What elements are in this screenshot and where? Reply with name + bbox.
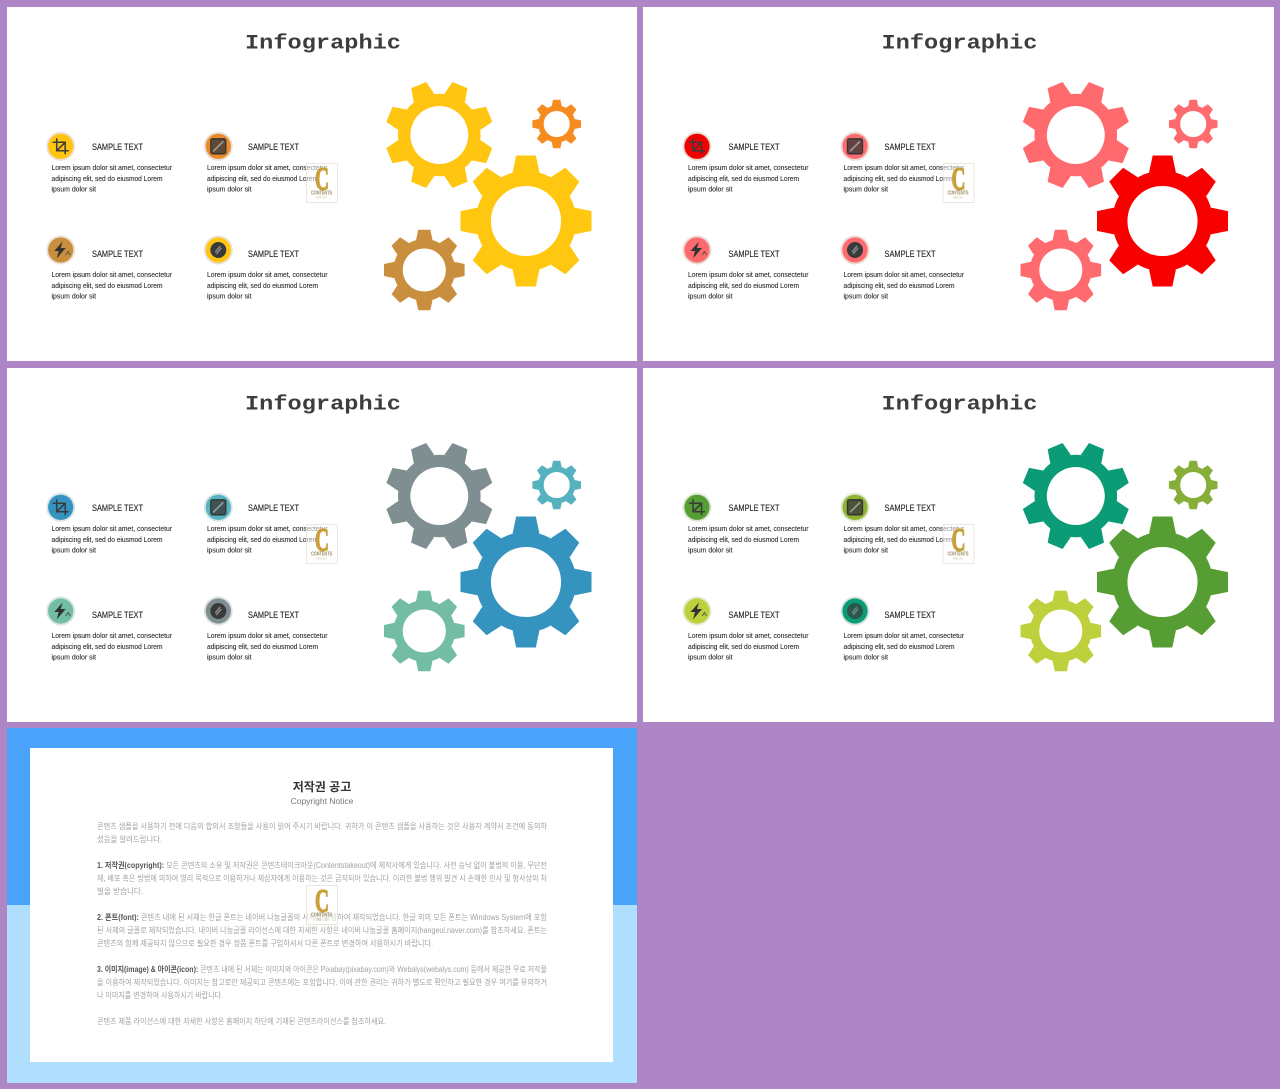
item: circle <box>840 236 964 300</box>
item: bolt: SAMPLE TEXT <box>728 610 780 620</box>
watermark: TAKE OUT <box>316 556 327 560</box>
panel: copyright notice <box>7 728 637 1083</box>
item: bolt: Lorem ipsum dolor sit amet, consectetur <box>688 631 809 640</box>
item: square: Lorem ipsum dolor sit amet, consectetur <box>844 524 964 533</box>
notice section 2: 된 서체의 글꼴로 제작되었습니다. 네이버 나눔글꼴 라이선스에 대한 자세한 사항은 네이버 나눔글꼴 홈페이지(hangeul.naver.com)를 참조하세요. 폰트는 <box>97 925 547 935</box>
notice section 1: 1. 저작권(copyright): 모든 콘텐츠의 소유 및 저작권은 콘텐츠테이크아웃(Contentstakeout)에 제작사에게 있습니다. 사전 승낙 없이 불법적 이용, 무단전 <box>97 860 547 870</box>
item: crop: ipsum dolor sit <box>52 546 97 554</box>
item: bolt: adipiscing elit, sed do eiusmod Lorem <box>688 281 799 290</box>
notice section 2: 2. 폰트(font): 콘텐츠 내에 된 서체는 한글 폰트는 네이버 나눔글꼴의 서체를 활용하여 제작되었습니다. 한글 외의 모든 폰트는 Windows System에 포함 <box>97 912 548 922</box>
item: crop: Lorem ipsum dolor sit amet, consectetur <box>52 163 172 172</box>
item: bolt: Lorem ipsum dolor sit amet, consectetur <box>688 270 809 279</box>
item: circle: Lorem ipsum dolor sit amet, consectetur <box>207 270 328 279</box>
item: crop: SAMPLE TEXT <box>728 503 780 513</box>
watermark: C <box>315 884 329 920</box>
item: square <box>204 493 328 554</box>
item: circle: SAMPLE TEXT <box>884 249 936 259</box>
notice section 2 <box>97 912 548 948</box>
item: square: Lorem ipsum dolor sit amet, consectetur <box>207 163 328 172</box>
item: circle <box>204 596 328 662</box>
notice section 3: 을 이용하여 제작되었습니다. 이미지는 참고로만 제공되고 콘텐츠에는 포함합니다. 이에 관한 권리는 귀하가 별도로 확인하고 필요한 경우 여기를 유의하거 <box>97 977 547 987</box>
item: bolt: SAMPLE TEXT <box>92 610 143 620</box>
item: circle: adipiscing elit, sed do eiusmod Lorem <box>844 642 954 651</box>
item: circle: adipiscing elit, sed do eiusmod Lorem <box>207 642 318 651</box>
watermark: TAKE OUT <box>952 196 964 200</box>
item: circle: ipsum dolor sit <box>844 292 889 300</box>
panel: red gears <box>643 7 1274 361</box>
item: square: adipiscing elit, sed do eiusmod Lorem <box>844 535 954 544</box>
watermark: CONTENTS <box>948 190 969 196</box>
item: bolt: SAMPLE TEXT <box>92 249 143 259</box>
item: bolt: Lorem ipsum dolor sit amet, consectetur <box>52 631 172 640</box>
item: circle: adipiscing elit, sed do eiusmod Lorem <box>844 281 954 290</box>
item: bolt <box>682 236 809 300</box>
panel: blue gears <box>7 368 637 722</box>
watermark <box>306 884 338 924</box>
item: bolt: ipsum dolor sit <box>52 292 97 300</box>
item: crop: SAMPLE TEXT <box>728 142 780 152</box>
notice subheading: Copyright Notice <box>291 796 354 806</box>
item: square: adipiscing elit, sed do eiusmod Lorem <box>207 174 318 183</box>
notice section 3: 나 이미지를 변경하여 사용하시기 바랍니다. <box>97 990 223 1000</box>
notice section 3: 3. 이미지(image) & 아이콘(icon): 콘텐츠 내에 된 서체는 이미지와 아이콘은 Pixabay(pixabay.com)와 Webalys(webalys.com) 등에서 제공한 무료 저작물 <box>97 964 547 974</box>
item: crop: Lorem ipsum dolor sit amet, consectetur <box>688 163 809 172</box>
watermark: CONTENTS <box>311 912 333 918</box>
item: crop: adipiscing elit, sed do eiusmod Lorem <box>688 535 799 544</box>
notice section 1: 벌을 받습니다. <box>97 886 143 896</box>
title: Infographic <box>245 394 401 416</box>
notice section 1 <box>97 860 547 896</box>
item: circle: ipsum dolor sit <box>207 652 252 662</box>
notice heading: 저작권 공고 <box>293 779 351 794</box>
item: bolt: adipiscing elit, sed do eiusmod Lorem <box>52 642 162 651</box>
item: crop: SAMPLE TEXT <box>92 142 143 152</box>
item: square: Lorem ipsum dolor sit amet, consectetur <box>207 524 328 533</box>
item: bolt <box>682 596 809 662</box>
item: crop <box>46 493 172 554</box>
gears <box>1005 425 1228 671</box>
notice intro: 셨음을 알려드립니다. <box>97 834 162 844</box>
notice closing line: 콘텐츠 제품 라이선스에 대한 자세한 사항은 홈페이지 하단에 기재된 콘텐츠라이선스를 참조하세요. <box>97 1016 386 1026</box>
item: crop: adipiscing elit, sed do eiusmod Lorem <box>52 174 162 183</box>
item: square: SAMPLE TEXT <box>248 142 299 152</box>
item: crop: adipiscing elit, sed do eiusmod Lorem <box>52 535 162 544</box>
item: circle: SAMPLE TEXT <box>248 610 299 620</box>
item: crop: adipiscing elit, sed do eiusmod Lorem <box>688 174 799 183</box>
item: square: adipiscing elit, sed do eiusmod Lorem <box>207 535 318 544</box>
notice section 3 <box>97 964 547 1000</box>
watermark: CONTENTS <box>948 552 969 558</box>
gears <box>1005 64 1228 310</box>
item: bolt: SAMPLE TEXT <box>728 249 780 259</box>
item: circle: ipsum dolor sit <box>207 292 252 300</box>
item: circle: ipsum dolor sit <box>844 652 889 662</box>
item: square: SAMPLE TEXT <box>884 503 936 513</box>
item: crop: Lorem ipsum dolor sit amet, consectetur <box>52 524 172 533</box>
watermark <box>306 162 338 202</box>
item: circle: Lorem ipsum dolor sit amet, consectetur <box>844 270 964 279</box>
item: crop: ipsum dolor sit <box>688 546 733 554</box>
item: bolt: ipsum dolor sit <box>688 292 733 300</box>
item: crop: ipsum dolor sit <box>52 184 97 194</box>
item: bolt: ipsum dolor sit <box>688 652 733 662</box>
item: crop: Lorem ipsum dolor sit amet, consectetur <box>688 524 809 533</box>
notice intro <box>97 821 548 844</box>
watermark: TAKE OUT <box>952 556 964 560</box>
item: square: adipiscing elit, sed do eiusmod Lorem <box>844 174 954 183</box>
item: square: ipsum dolor sit <box>844 546 889 554</box>
item: square: SAMPLE TEXT <box>248 503 299 513</box>
item: crop <box>46 132 172 194</box>
notice section 1: 재, 배포 혹은 방법에 의하여 영리 목적으로 이용하거나 제삼자에게 이용하는 것은 금지되어 있습니다. 이러한 불법 행위 발견 시 손해한 민사 및 형사상의 처 <box>97 873 547 883</box>
watermark: C <box>315 522 329 558</box>
item: crop: SAMPLE TEXT <box>92 503 143 513</box>
item: bolt: Lorem ipsum dolor sit amet, consectetur <box>52 270 172 279</box>
watermark <box>943 522 974 564</box>
item: square: Lorem ipsum dolor sit amet, consectetur <box>844 163 964 172</box>
item: bolt <box>46 236 172 300</box>
panel: yellow gears <box>7 7 637 361</box>
item: square <box>840 493 964 554</box>
watermark <box>943 162 974 202</box>
title: Infographic <box>882 394 1038 416</box>
watermark: C <box>952 162 966 198</box>
item: circle <box>204 236 328 300</box>
item: circle: SAMPLE TEXT <box>884 610 936 620</box>
item: square: SAMPLE TEXT <box>884 142 936 152</box>
notice intro: 콘텐츠 샘플을 사용하기 전에 다음의 합의서 조항들을 사용이 읽어 주시기 바랍니다. 귀하가 이 콘텐츠 샘플을 사용하는 것은 사용자 계약서 조건에 동의하 <box>97 821 548 831</box>
item: crop <box>682 493 809 554</box>
gears <box>369 425 592 671</box>
item: square <box>204 132 328 194</box>
title: Infographic <box>882 32 1038 56</box>
item: bolt <box>46 596 172 662</box>
item: crop <box>682 132 809 194</box>
gears <box>369 64 592 310</box>
item: circle: SAMPLE TEXT <box>248 249 299 259</box>
item: square: ipsum dolor sit <box>844 184 889 194</box>
item: circle: adipiscing elit, sed do eiusmod Lorem <box>207 281 318 290</box>
watermark: C <box>315 162 329 198</box>
item: square: ipsum dolor sit <box>207 546 252 554</box>
item: circle: Lorem ipsum dolor sit amet, consectetur <box>844 631 964 640</box>
panel: green gears <box>643 368 1274 722</box>
watermark: TAKE OUT <box>316 196 327 200</box>
item: bolt: ipsum dolor sit <box>52 652 97 662</box>
watermark: CONTENTS <box>311 552 333 558</box>
title: Infographic <box>245 32 401 56</box>
notice section 2: 콘텐츠의 함께 제공되지 않으므로 필요한 경우 정품 폰트를 구입하셔서 다른 폰트로 변경하여 사용하시기 바랍니다. <box>97 938 433 948</box>
item: crop: ipsum dolor sit <box>688 184 733 194</box>
watermark: CONTENTS <box>311 190 333 196</box>
watermark: TAKE OUT <box>316 918 327 922</box>
item: square <box>840 132 964 194</box>
watermark: C <box>952 522 966 558</box>
watermark <box>306 522 338 564</box>
item: circle: Lorem ipsum dolor sit amet, consectetur <box>207 631 328 640</box>
item: bolt: adipiscing elit, sed do eiusmod Lorem <box>688 642 799 651</box>
item: square: ipsum dolor sit <box>207 184 252 194</box>
item: bolt: adipiscing elit, sed do eiusmod Lorem <box>52 281 162 290</box>
item: circle <box>840 596 964 662</box>
